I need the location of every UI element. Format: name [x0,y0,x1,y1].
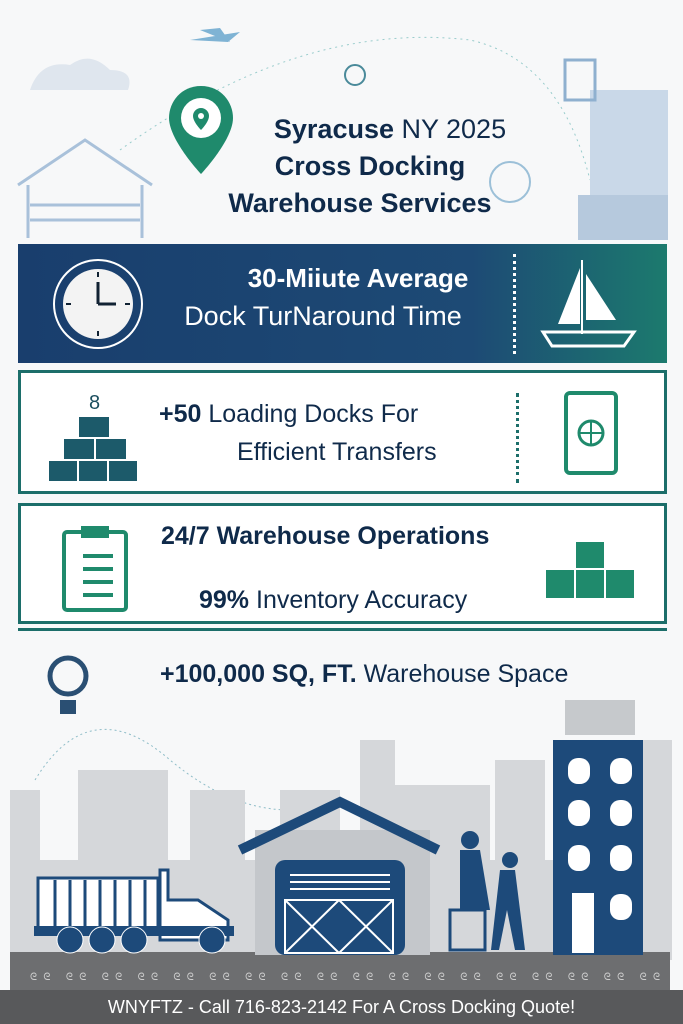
icon: ship [540,260,637,348]
text: 30-minute: 30-Miiute Average [248,263,468,293]
title: Cross Docking [275,151,465,181]
text: loading docks: Efficient Transfers [237,438,437,466]
icon: tablet globe [564,391,618,475]
scene: city and warehouse [10,700,672,990]
icon: clipboard [62,526,128,612]
text: 30-minute: Dock TurNaround Time [184,301,462,331]
title: Syracuse NY 2025 [274,114,506,144]
title [228,114,506,218]
icon: box pyramid: 8 [89,392,100,414]
panel: loading docks [18,370,667,494]
text: operations: 24/7 Warehouse Operations [161,522,489,550]
text: warehouse space: +100,000 SQ, FT. Warehouse Space [160,660,568,688]
blue building [553,690,643,955]
text: loading docks [159,400,437,466]
background top decor [17,28,668,240]
scene: city and warehouse: ᘓᘓ ᘓᘓ ᘓᘓ ᘓᘓ ᘓᘓ ᘓᘓ ᘓᘓ ᘓᘓ ᘓᘓ ᘓᘓ ᘓᘓ ᘓᘓ ᘓᘓ ᘓᘓ ᘓᘓ ᘓᘓ ᘓᘓ ᘓᘓ [30,972,660,983]
panel: operations [18,503,667,624]
text: 30-minute [184,263,468,331]
icon: box pyramid [49,392,137,481]
panel: dock turnaround [18,244,667,363]
footer bar: WNYFTZ - Call 716-823-2142 For A Cross Docking Quote! [108,997,575,1017]
text: loading docks: +50 Loading Docks For [159,400,418,428]
people [450,831,525,950]
panel: operations: 99% Inventory Accuracy [199,586,467,614]
warehouse [240,802,438,955]
footer bar [0,990,683,1024]
truck [34,870,234,953]
icon: magnifier [48,656,88,714]
icon: clock [53,259,143,349]
icon: location pin [169,86,233,174]
title: Warehouse Services [228,188,492,218]
icon: boxes [546,542,634,598]
